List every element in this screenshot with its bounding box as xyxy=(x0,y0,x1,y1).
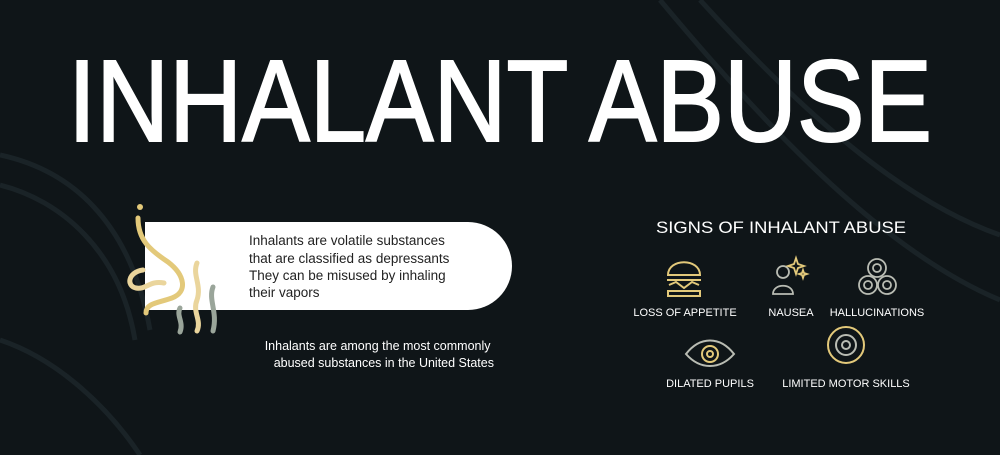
icon: gear xyxy=(828,327,864,363)
icon: spirals xyxy=(859,259,896,294)
labels: NAUSEA xyxy=(768,307,814,319)
icon: burger xyxy=(667,262,701,296)
heading: signs: SIGNS OF INHALANT ABUSE xyxy=(656,218,906,237)
text block: definition: Inhalants are volatile substances xyxy=(249,233,445,248)
icon: eye xyxy=(686,340,734,366)
labels: LOSS OF APPETITE xyxy=(633,307,737,319)
text block: definition: They can be misused by inhaling xyxy=(249,268,446,283)
text block: definition: that are classified as depressants xyxy=(249,251,450,266)
labels xyxy=(633,307,924,390)
labels: LIMITED MOTOR SKILLS xyxy=(782,378,910,390)
text block: definition: their vapors xyxy=(249,285,320,300)
panel: description pill xyxy=(145,222,512,310)
icon: nausea person with sparkles xyxy=(773,258,807,294)
labels: DILATED PUPILS xyxy=(666,378,754,390)
text block: commonly abused: Inhalants are among the most commonly xyxy=(265,339,491,353)
text block: commonly abused: abused substances in the United States xyxy=(274,356,494,370)
labels: HALLUCINATIONS xyxy=(830,307,924,319)
icon: nose with vapors xyxy=(130,204,214,332)
